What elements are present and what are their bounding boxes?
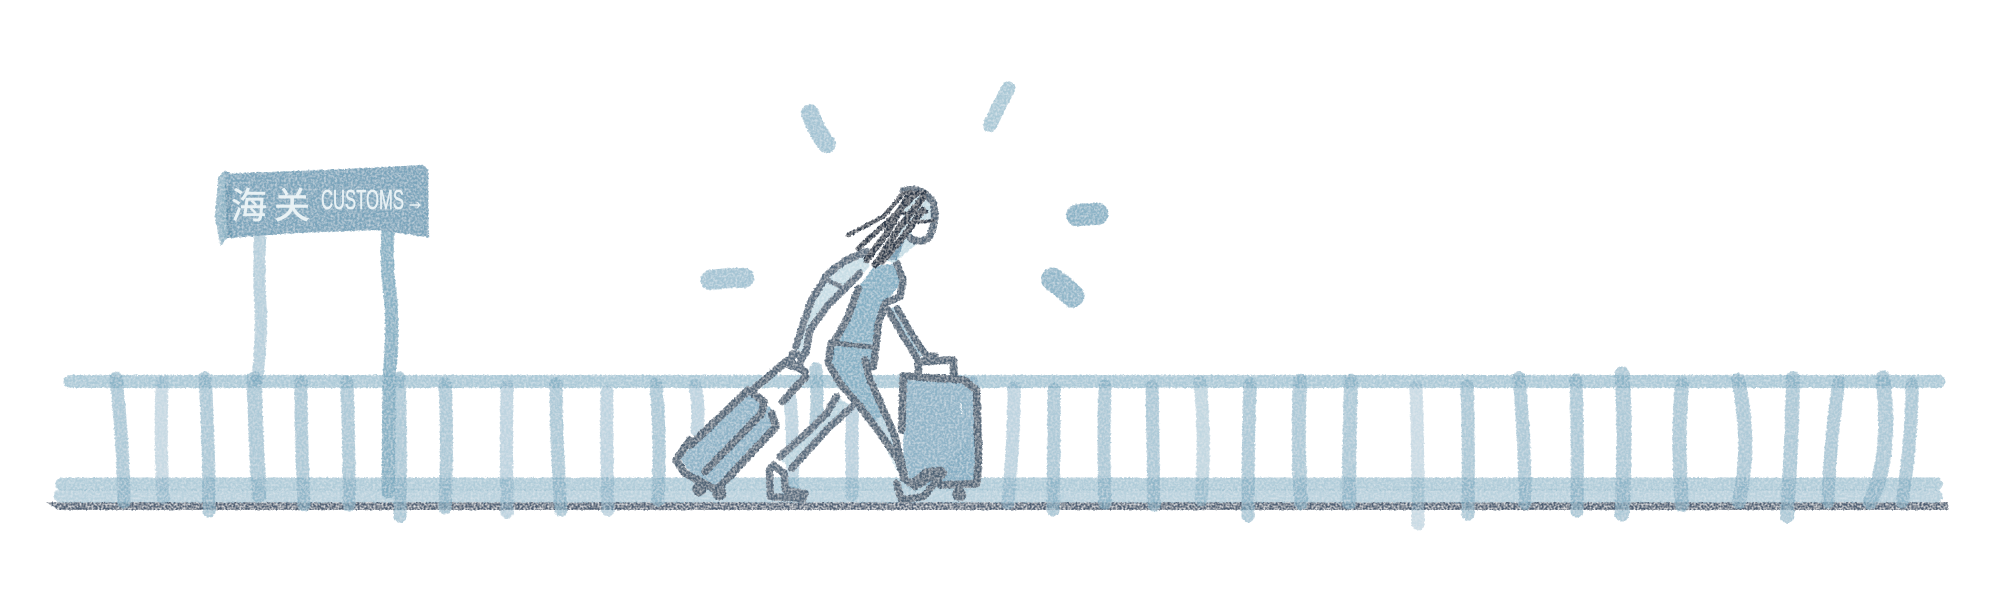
sign board shading xyxy=(220,183,232,239)
fence bars xyxy=(116,369,1912,524)
sign text: → xyxy=(406,188,424,215)
front arm xyxy=(888,307,936,362)
torso and front leg xyxy=(828,263,943,500)
customs sign xyxy=(215,165,429,492)
fence xyxy=(60,369,1939,524)
sign text: 海关 xyxy=(231,185,317,226)
rear suitcase xyxy=(676,361,806,500)
burst marks xyxy=(711,88,1097,296)
fence rails xyxy=(60,382,1939,496)
head and hair xyxy=(848,190,935,265)
rear arm xyxy=(790,252,870,367)
ground line xyxy=(46,502,1948,510)
rear leg xyxy=(769,397,853,499)
sign board xyxy=(215,165,429,246)
sign posts xyxy=(257,223,392,492)
traveller with suitcases xyxy=(676,190,979,501)
sign text xyxy=(231,184,424,226)
sign text: CUSTOMS xyxy=(321,184,404,215)
upright suitcase xyxy=(902,360,979,501)
